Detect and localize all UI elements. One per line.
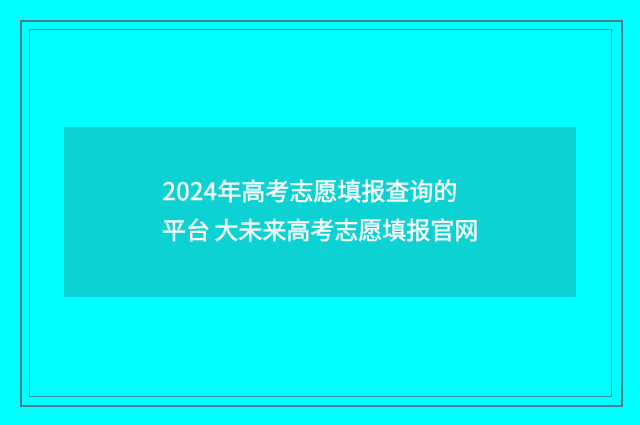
panel: title banner — [64, 127, 576, 297]
title line 1: 2024年高考志愿填报查询的 — [162, 172, 457, 207]
title line 2: 平台 大未来高考志愿填报官网 — [162, 211, 478, 246]
title text — [162, 172, 478, 246]
inner border frame — [29, 29, 612, 397]
